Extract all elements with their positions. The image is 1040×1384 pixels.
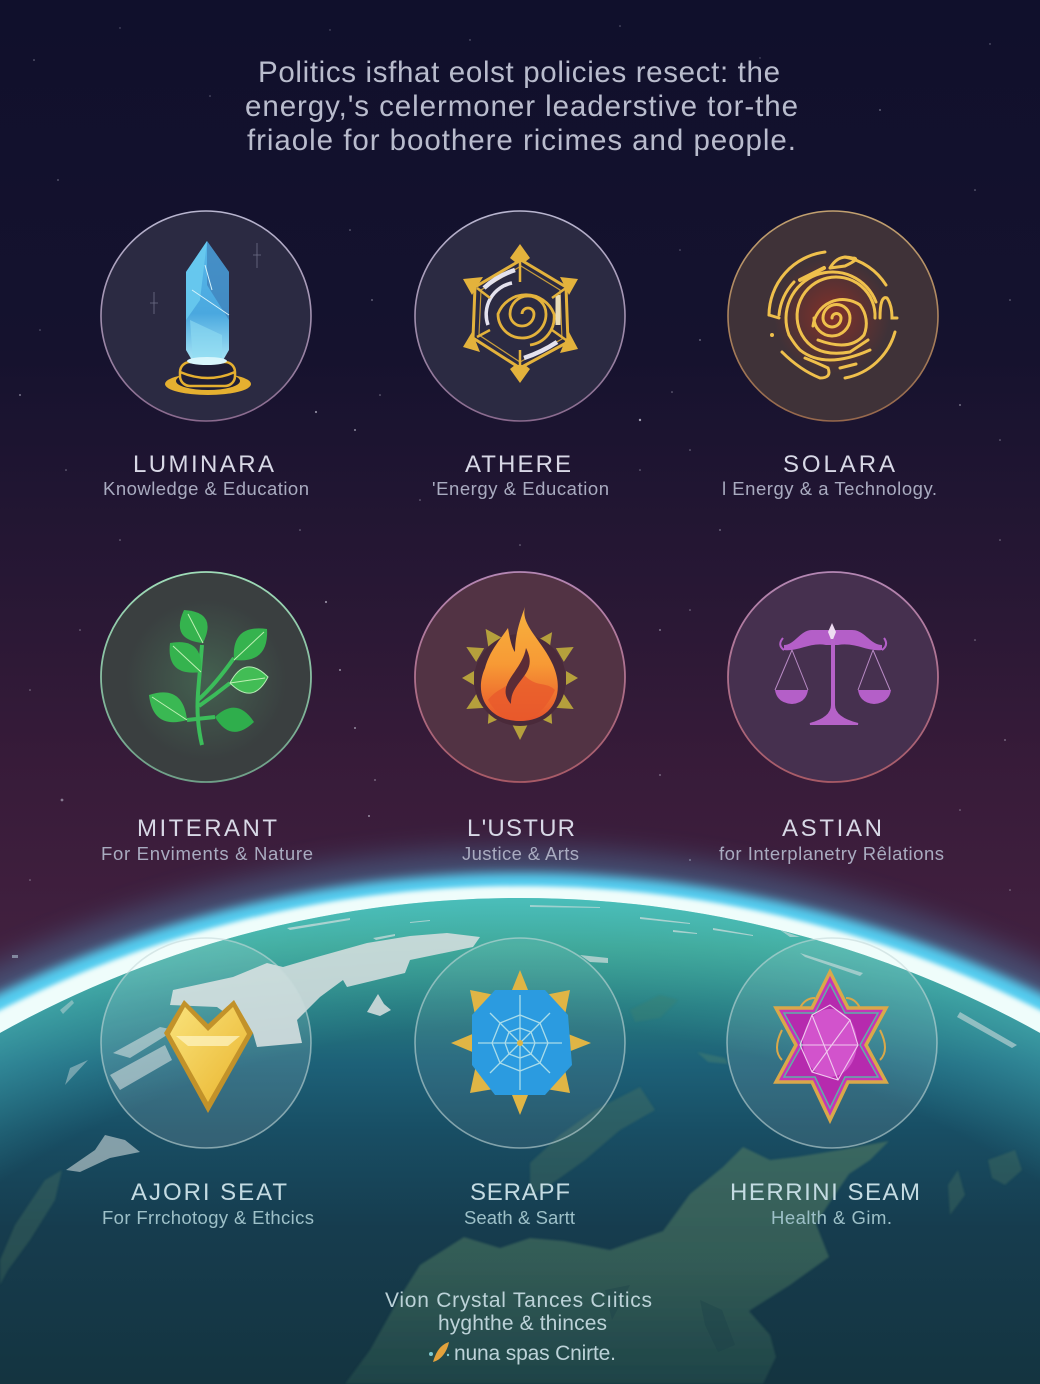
panel: Serapf — [415, 938, 625, 1228]
icon: magenta six-pointed star — [776, 972, 886, 1120]
disc: Ajori Seat — [101, 938, 311, 1148]
description: Herrini Seam: Health & Gim. — [771, 1207, 892, 1228]
label: Astian: ASTIAN — [782, 815, 882, 842]
disc: Lustur — [415, 572, 625, 782]
description: Ajori Seat: For Frrchotogy & Ethcics — [102, 1207, 314, 1228]
panel: Astian — [719, 572, 944, 864]
footer text: hyghthe & thinces — [438, 1312, 607, 1335]
disc: Luminara — [101, 211, 311, 421]
icon: purple balance scales — [775, 623, 891, 724]
label: Miterant: MITERANT — [137, 815, 277, 842]
planet atmosphere glow — [0, 850, 1040, 1384]
description: Luminara: Knowledge & Education — [103, 478, 309, 499]
heading text: Politics isfhat eolst policies resect: the — [258, 56, 780, 89]
footer text — [385, 1289, 652, 1365]
label: Serapf: SERAPF — [470, 1179, 570, 1206]
description: Astian: for Interplanetry Rêlations — [719, 843, 944, 864]
panel: Luminara — [101, 211, 311, 499]
disc: Serapf — [415, 938, 625, 1148]
land mass: white cloud continent — [60, 905, 1017, 1172]
land masses: olive continents — [0, 995, 1022, 1384]
footer text: Vion Crystal Tances Cıitics — [385, 1289, 652, 1312]
description: Serapf: Seath & Sartt — [464, 1207, 575, 1228]
description: Lustur: Justice & Arts — [462, 843, 579, 864]
starfield — [12, 25, 1011, 958]
label: Athere: ATHERE — [465, 451, 571, 478]
disc: Herrini Seam — [727, 938, 937, 1148]
disc: Astian — [728, 572, 938, 782]
panel: Athere — [415, 211, 625, 499]
icon: golden heart gem — [164, 1000, 253, 1113]
panel: Ajori Seat — [101, 938, 314, 1228]
panel: Herrini Seam — [727, 938, 937, 1228]
icon: golden hexagon spiral — [463, 244, 578, 383]
label: Ajori Seat: AJORI SEAT — [131, 1179, 287, 1206]
label: Lustur: L'USTUR — [467, 815, 575, 842]
heading text: energy,'s celermoner leaderstive tor-the — [245, 90, 798, 123]
disc: Athere — [415, 211, 625, 421]
panel: Miterant — [101, 572, 313, 864]
label: Herrini Seam: HERRINI SEAM — [730, 1179, 920, 1206]
icon: crystal on gold pedestal — [150, 241, 261, 395]
icon: small comet — [429, 1342, 449, 1362]
label: Luminara: LUMINARA — [133, 451, 274, 478]
planet earth — [0, 880, 1040, 1384]
label: Solara: SOLARA — [783, 451, 895, 478]
icon: golden labyrinth spiral — [769, 252, 897, 378]
heading text: friaole for boothere ricimes and people. — [247, 124, 796, 157]
icon: flame in spiked sun ring — [462, 607, 578, 740]
description: Miterant: For Enviments & Nature — [101, 843, 313, 864]
disc: Miterant — [101, 572, 311, 782]
icon: blue web compass star — [451, 970, 591, 1115]
icon: green leafy branch — [126, 600, 286, 760]
footer text: nuna spas Cnirte. — [454, 1342, 616, 1365]
description: Athere: 'Energy & Education — [432, 478, 609, 499]
panel: Solara — [722, 211, 938, 499]
description: Solara: l Energy & a Technology. — [722, 478, 937, 499]
heading text — [245, 56, 798, 157]
disc: Solara — [728, 211, 938, 421]
dark inlets in continent — [606, 1286, 629, 1292]
panel: Lustur — [415, 572, 625, 864]
